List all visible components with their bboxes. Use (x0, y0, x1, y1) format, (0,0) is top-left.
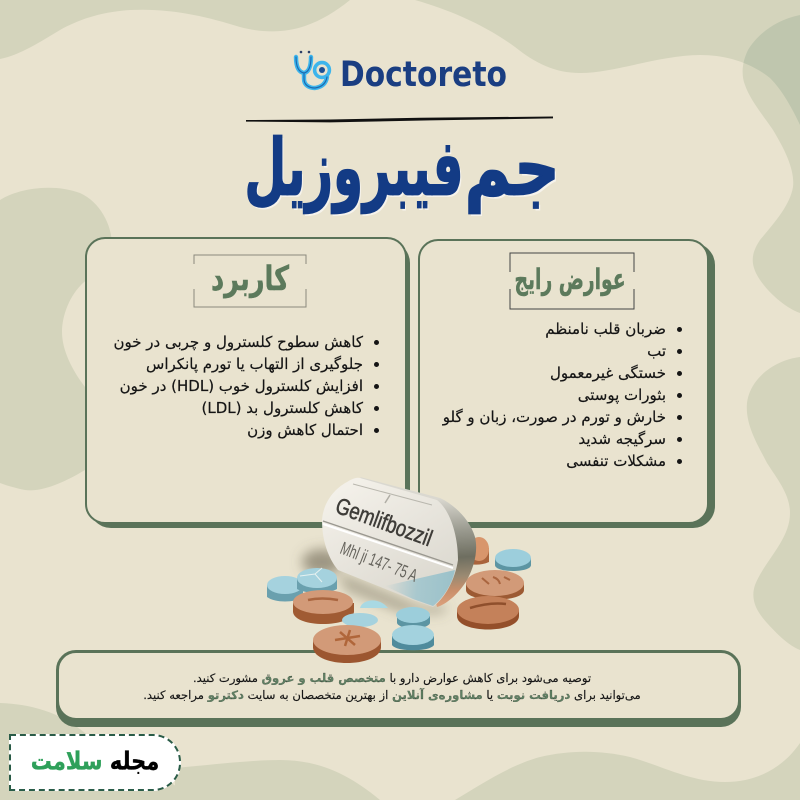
orange tablet lower right (457, 596, 519, 630)
capsule bluish lower edge (385, 570, 455, 606)
panel body (85, 237, 407, 524)
capsule side (360, 477, 476, 607)
blue tablet left (267, 576, 303, 602)
recommendation text: می‌توانید برای دریافت نوبت یا مشاوره‌ی آنلاین از بهترین متخصصان به سایت دکترتو مراجعه کنید. (143, 688, 641, 702)
list: side effects (442, 320, 682, 470)
heading: side effects: عوارض رایج (515, 264, 626, 297)
panel: usage (left) (85, 237, 410, 528)
panel body (56, 650, 741, 721)
list: usage: افزایش کلسترول خوب (HDL) در خون (120, 377, 363, 395)
list: usage: احتمال کاهش وزن (247, 421, 363, 439)
logo: Doctoreto (294, 50, 507, 92)
capsule face (322, 478, 458, 607)
blue tablet top right (495, 549, 531, 571)
capsule name: Gemlifbozzil (332, 492, 436, 551)
list: side effects: سرگیجه شدید (578, 430, 666, 448)
divider line (246, 116, 553, 122)
panel body (418, 239, 709, 524)
recommendation text (143, 671, 641, 702)
list: side effects: خستگی غیرمعمول (550, 364, 666, 382)
icon: stethoscope (294, 50, 332, 90)
title (244, 122, 560, 216)
small blue tablets (342, 600, 434, 650)
illustration: gemfibrozil pills (267, 477, 531, 663)
title: فیبروزیل (244, 122, 464, 213)
list: side effects: ضربان قلب نامنظم (545, 320, 666, 338)
heading: usage: کاربرد (211, 260, 289, 299)
orange tablet behind (465, 537, 489, 565)
list: usage (113, 333, 379, 439)
broken blue tablet (297, 568, 337, 593)
heading frame: side effects (510, 252, 634, 310)
list: side effects: خارش و تورم در صورت، زبان و گلو (443, 408, 666, 426)
list: side effects: بثورات پوستی (578, 386, 666, 404)
badge: health magazine (9, 734, 181, 791)
orange tablet front (313, 625, 381, 663)
list: side effects: تب (647, 342, 666, 360)
capsule code: Mhl ji 147- 75 A (338, 538, 420, 586)
orange tablet left (293, 590, 354, 624)
big capsule tablet (322, 477, 476, 607)
recommendation text: توصیه می‌شود برای کاهش عوارض دارو با متخصص قلب و عروق مشورت کنید. (193, 671, 591, 685)
list: side effects: مشکلات تنفسی (566, 452, 666, 470)
badge: health magazine: مجله سلامت (31, 746, 159, 775)
panel offset shadow (89, 241, 410, 528)
list: usage: کاهش کلسترول بد (LDL) (201, 399, 363, 417)
panel: common side effects (right) (418, 239, 715, 528)
list: usage: کاهش سطوح کلسترول و چربی در خون (113, 333, 363, 351)
orange tablet right (466, 570, 524, 600)
panel: recommendation (bottom) (56, 650, 741, 727)
list: usage: جلوگیری از التهاب یا تورم پانکراس (146, 355, 363, 373)
heading frame: usage (194, 254, 306, 308)
title: جم (465, 122, 560, 213)
pill shadow (302, 549, 450, 614)
panel offset shadow (423, 243, 715, 528)
panel offset shadow (56, 656, 741, 727)
